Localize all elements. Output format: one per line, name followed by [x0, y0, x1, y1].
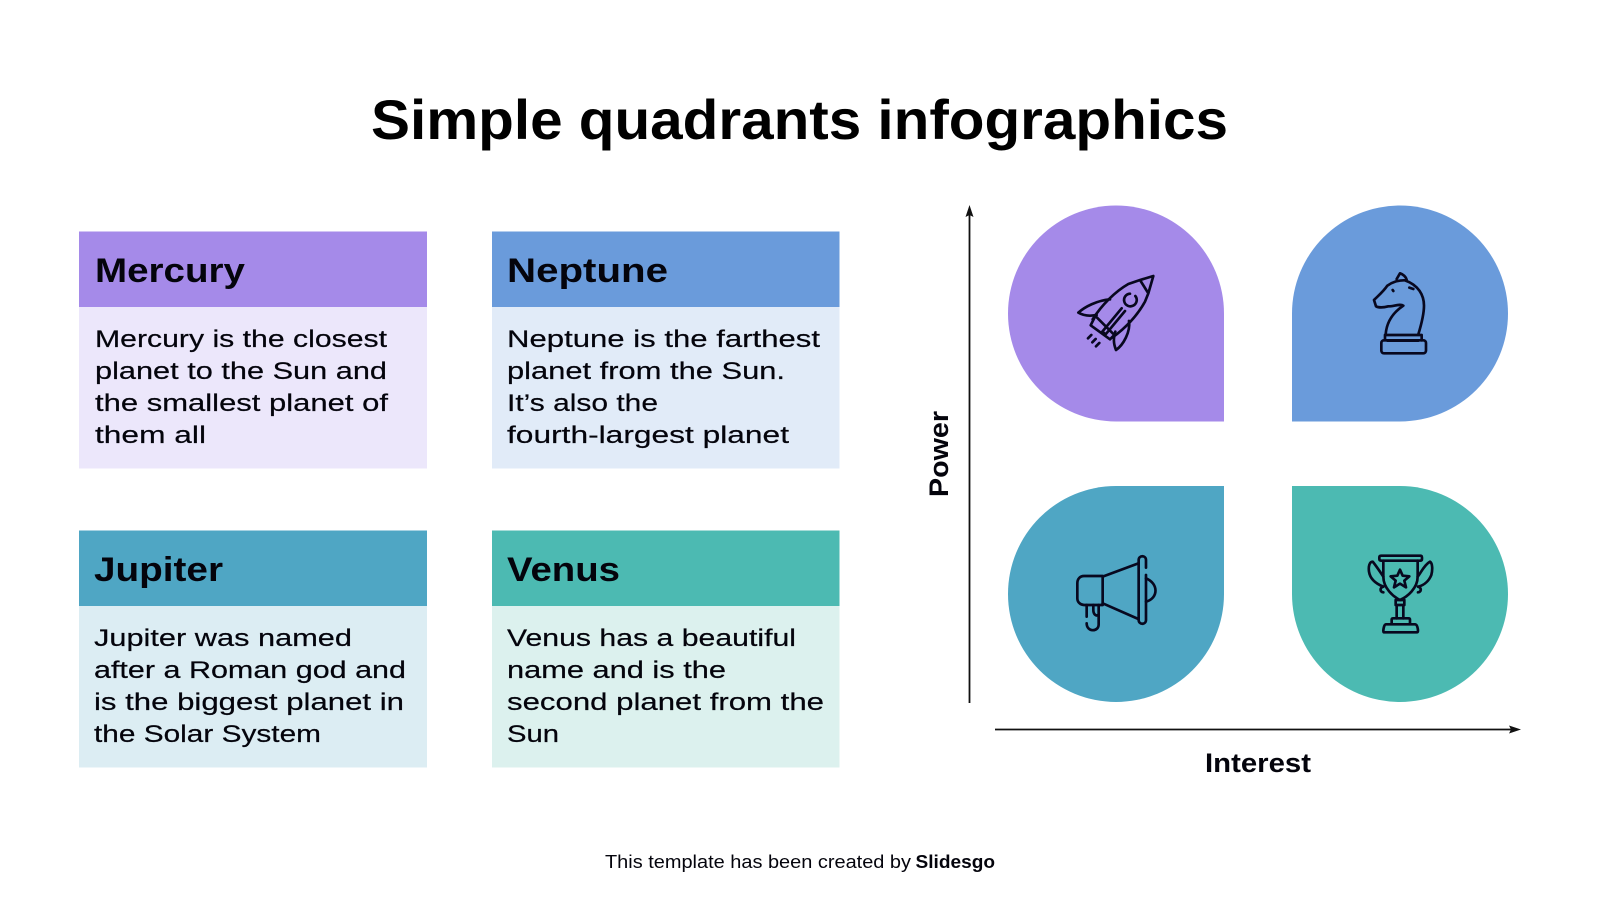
- icon: trophy: [1369, 556, 1432, 632]
- Venus heading: Venus: [507, 551, 620, 589]
- icon: rocket: [1078, 276, 1153, 350]
- quadrant: green: [1292, 486, 1508, 702]
- icon: megaphone: [1077, 556, 1155, 630]
- quadrant: purple: [1008, 206, 1224, 422]
- panel: Jupiter: [79, 530, 427, 768]
- Neptune heading: Neptune: [507, 252, 668, 290]
- Venus description: [507, 625, 824, 748]
- Mercury description: [95, 326, 388, 449]
- Neptune description: Neptune is the farthest: [507, 326, 820, 353]
- Neptune description: fourth-largest planet: [507, 422, 789, 449]
- Jupiter heading: Jupiter: [94, 551, 223, 589]
- Jupiter header band: [79, 530, 427, 606]
- icon: chess knight: [1374, 273, 1426, 353]
- Neptune header band: [492, 232, 840, 307]
- Jupiter body background: [79, 606, 427, 768]
- y axis arrow: [966, 205, 974, 703]
- Mercury description: them all: [95, 422, 206, 449]
- Neptune body background: [492, 307, 840, 468]
- Venus description: Sun: [507, 721, 559, 748]
- Venus description: second planet from the: [507, 689, 824, 716]
- x axis arrow: [995, 726, 1521, 734]
- footer credit: This template has been created by: [605, 852, 911, 872]
- panel: Mercury: [79, 232, 427, 468]
- x axis label: Interest: [1205, 748, 1311, 778]
- title: Simple quadrants infographics: [371, 88, 1228, 151]
- Jupiter description: after a Roman god and: [94, 657, 406, 684]
- Neptune description: [507, 326, 820, 449]
- Jupiter description: [94, 625, 406, 748]
- Venus body background: [492, 606, 840, 768]
- Mercury body background: [79, 307, 427, 468]
- footer credit: Slidesgo: [916, 852, 995, 872]
- Venus header band: [492, 530, 840, 606]
- Neptune description: planet from the Sun.: [507, 358, 785, 385]
- Jupiter description: is the biggest planet in: [94, 689, 404, 716]
- panel: Neptune: [492, 232, 840, 468]
- y axis label: Power: [924, 410, 954, 497]
- Mercury description: planet to the Sun and: [95, 358, 387, 385]
- Mercury description: Mercury is the closest: [95, 326, 387, 353]
- Mercury heading: Mercury: [95, 252, 245, 290]
- Mercury description: the smallest planet of: [95, 390, 388, 417]
- Venus description: name and is the: [507, 657, 726, 684]
- Jupiter description: Jupiter was named: [94, 625, 352, 652]
- quadrant: blue: [1292, 206, 1508, 422]
- Mercury header band: [79, 232, 427, 307]
- Venus description: Venus has a beautiful: [507, 625, 796, 652]
- panel: Venus: [492, 530, 840, 768]
- Neptune description: It’s also the: [507, 390, 658, 417]
- Jupiter description: the Solar System: [94, 721, 321, 748]
- quadrant: teal blue: [1008, 486, 1224, 702]
